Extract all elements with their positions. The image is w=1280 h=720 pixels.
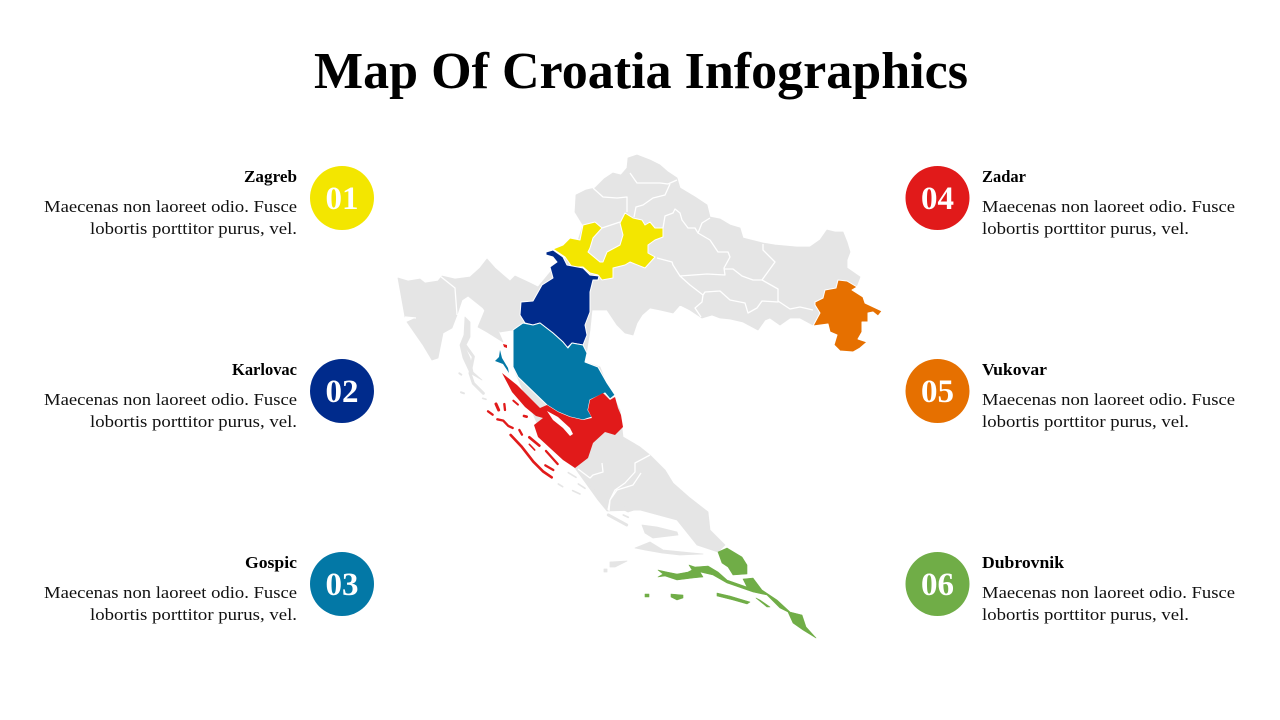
description	[982, 583, 1235, 624]
description: Maecenas non laoreet odio. Fusce	[982, 390, 1235, 409]
description: Maecenas non laoreet odio. Fusce	[44, 197, 297, 216]
description: Maecenas non laoreet odio. Fusce	[982, 197, 1235, 216]
description: lobortis porttitor purus, vel.	[982, 412, 1189, 431]
item 05: Vukovar	[906, 359, 1235, 431]
number badge	[906, 552, 970, 616]
number badge	[310, 552, 374, 616]
description: Maecenas non laoreet odio. Fusce	[44, 583, 297, 602]
item 01: Zagreb	[44, 166, 374, 238]
region: Karlovac	[520, 250, 599, 348]
number badge: 03	[326, 567, 358, 603]
map: grey counties	[398, 155, 860, 572]
description: Maecenas non laoreet odio. Fusce	[982, 583, 1235, 602]
map: grey small islands	[459, 345, 628, 525]
region: Zadar	[488, 344, 623, 477]
number badge: 06	[921, 567, 954, 603]
name: Zadar	[982, 167, 1026, 186]
item 03: Gospic	[44, 552, 374, 624]
region: Dubrovnik	[645, 548, 816, 638]
description	[44, 583, 297, 624]
number badge: 05	[921, 374, 954, 410]
number badge	[906, 166, 970, 230]
description: lobortis porttitor purus, vel.	[982, 219, 1189, 238]
description	[982, 197, 1235, 238]
name: Dubrovnik	[982, 553, 1065, 572]
map: county borders	[405, 173, 813, 511]
item 06: Dubrovnik	[906, 552, 1235, 624]
name: Karlovac	[232, 360, 297, 379]
map of Croatia	[398, 155, 882, 638]
name: Vukovar	[982, 360, 1047, 379]
description: lobortis porttitor purus, vel.	[90, 412, 297, 431]
description: lobortis porttitor purus, vel.	[982, 605, 1189, 624]
item 02: Karlovac	[44, 359, 374, 431]
number badge: 02	[326, 374, 358, 410]
region: Zadar islands	[488, 392, 558, 477]
region: Gospic	[495, 323, 615, 420]
number badge	[310, 166, 374, 230]
description: Maecenas non laoreet odio. Fusce	[44, 390, 297, 409]
number badge	[906, 359, 970, 423]
description	[44, 390, 297, 431]
number badge	[310, 359, 374, 423]
region: Zagreb	[553, 213, 663, 280]
description	[44, 197, 297, 238]
description: lobortis porttitor purus, vel.	[90, 605, 297, 624]
number badge: 01	[326, 181, 358, 217]
description	[982, 390, 1235, 431]
region: Vukovar	[813, 280, 882, 352]
description: lobortis porttitor purus, vel.	[90, 219, 297, 238]
name: Gospic	[245, 553, 297, 572]
item 04: Zadar	[906, 166, 1235, 238]
number badge: 04	[921, 181, 954, 217]
title: Map Of Croatia Infographics	[314, 43, 968, 100]
name: Zagreb	[244, 167, 297, 186]
